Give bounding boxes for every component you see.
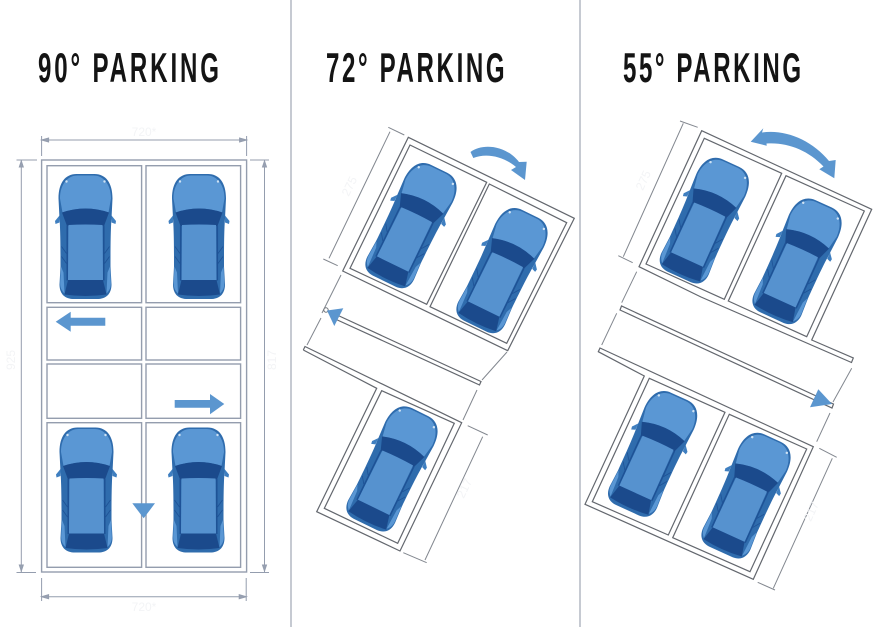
car lower right <box>693 425 800 565</box>
car upper right <box>448 200 558 340</box>
extension lines <box>307 275 507 420</box>
dimension lower right <box>403 426 488 563</box>
panel: 72 degree parking <box>303 45 574 563</box>
arrow: right <box>175 394 224 414</box>
dimension label right: 817 <box>265 350 279 370</box>
car top left <box>55 174 116 299</box>
upper bays <box>343 137 574 351</box>
panel: 55 degree parking <box>585 45 872 590</box>
dimension label top: 720* <box>132 125 157 139</box>
upper bays <box>639 131 872 362</box>
extension lines <box>602 272 852 442</box>
divider: panels 2 and 3 <box>579 0 581 627</box>
road strip with arrow <box>620 306 834 408</box>
car upper left <box>651 150 759 290</box>
road strips and lower bay <box>303 314 481 551</box>
lower bays and road strip <box>585 348 813 579</box>
dimension lower right <box>758 448 837 590</box>
arrow: aisle direction <box>810 389 832 407</box>
car top right <box>168 174 230 299</box>
car lower <box>338 399 448 538</box>
dimension label upper: 275 <box>633 168 654 192</box>
heading: 72 degree parking: 72° PARKING <box>326 45 505 92</box>
car bottom right <box>168 428 229 552</box>
dimension label upper: 275 <box>339 174 360 198</box>
dimension label bottom: 720* <box>132 600 157 614</box>
parking lot outline and bays <box>42 160 247 572</box>
car upper right <box>744 191 851 330</box>
heading: 90 degree parking: 90° PARKING <box>38 45 219 92</box>
panel: 90 degree parking <box>4 45 279 614</box>
car lower left <box>600 384 707 523</box>
arrow: left <box>56 312 105 332</box>
car bottom left <box>56 428 117 552</box>
dimension label left: 925 <box>4 350 18 370</box>
arrow: curved double <box>751 128 836 178</box>
dimension lines <box>16 136 269 601</box>
arrow: down <box>132 503 155 518</box>
divider: panels 1 and 2 <box>290 0 292 627</box>
heading: 55 degree parking: 55° PARKING <box>623 45 801 92</box>
arrow: aisle direction <box>324 308 343 326</box>
dimension label lower: 217 <box>454 476 475 500</box>
dimension upper left <box>618 121 698 263</box>
arrow: curved turn <box>470 147 527 180</box>
car upper left <box>357 155 467 295</box>
dimension upper left <box>323 127 404 266</box>
dimension label lower: 217 <box>801 499 822 523</box>
